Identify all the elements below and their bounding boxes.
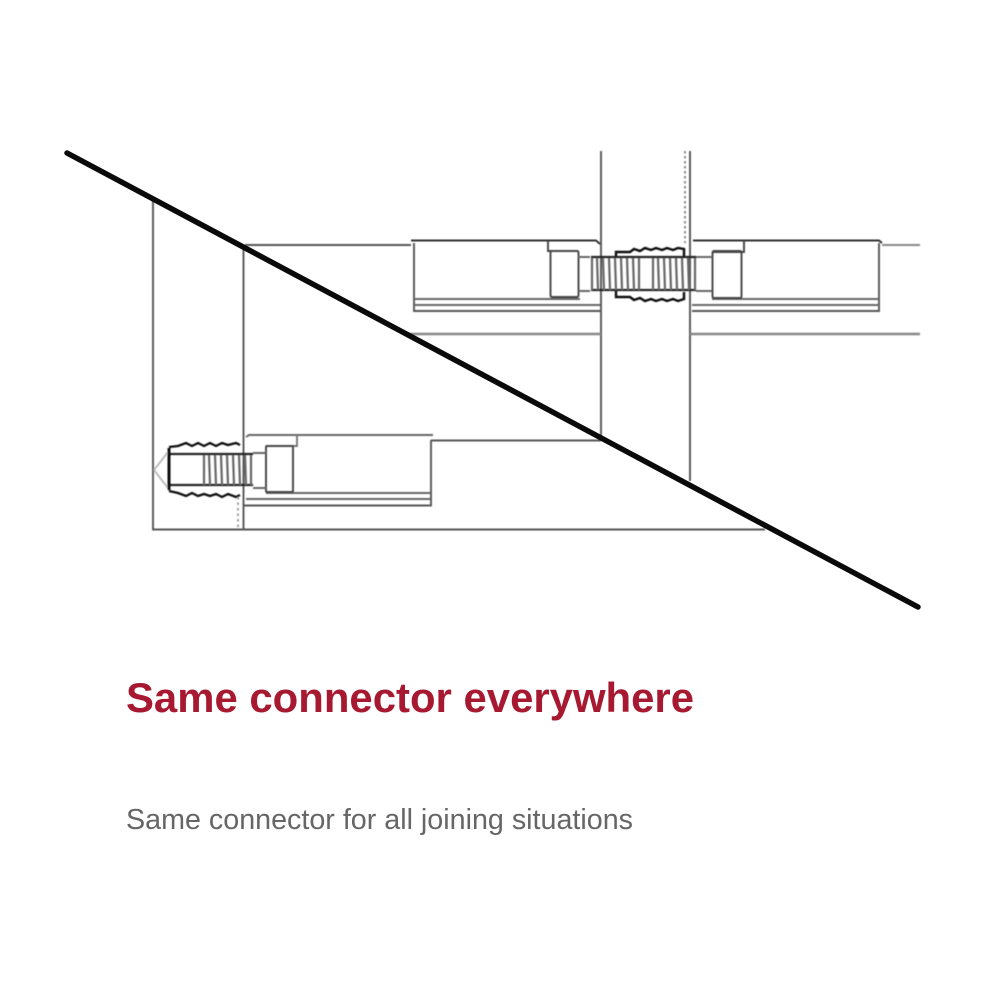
upper right panel bbox=[692, 240, 882, 311]
upper left panel bbox=[411, 240, 600, 311]
frame lines and posts bbox=[153, 151, 920, 530]
description text: Same connector for all joining situations bbox=[126, 804, 633, 836]
thick diagonal section line bbox=[67, 153, 918, 607]
title: Same connector everywhere bbox=[126, 674, 694, 721]
lower panel bbox=[243, 435, 433, 506]
lower connector: threaded insert bbox=[154, 443, 253, 528]
upper connector: threaded insert bbox=[591, 248, 696, 301]
technical drawing: connector joints bbox=[153, 151, 920, 530]
